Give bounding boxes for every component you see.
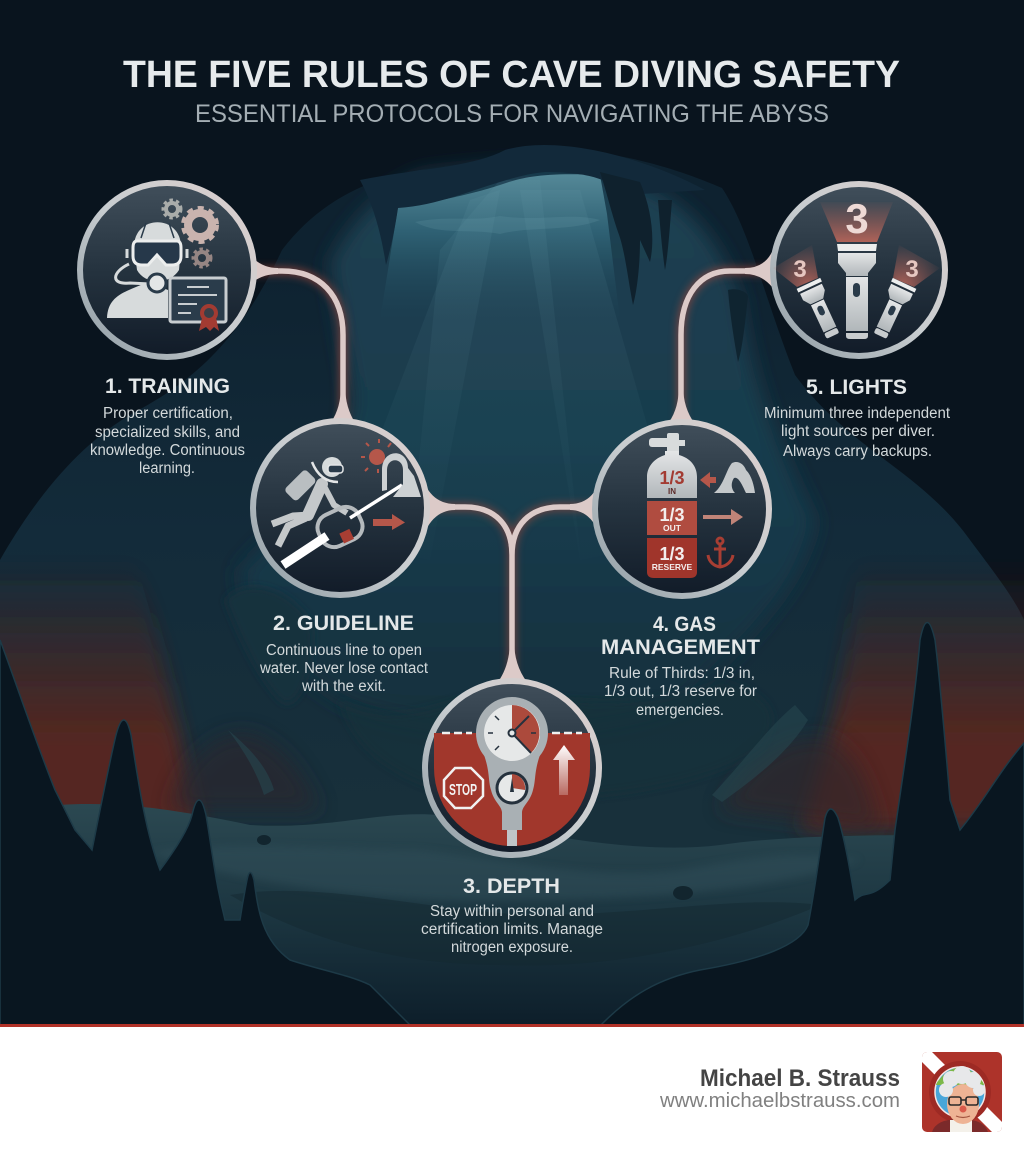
icon: lights: 3 xyxy=(845,195,869,242)
text: guideline description: Continuous line to open xyxy=(266,642,422,659)
foreground rocks: right xyxy=(600,622,1024,1026)
heading: 1. training: 1. TRAINING xyxy=(105,375,230,398)
panel: 5 lights xyxy=(764,184,951,460)
title: THE FIVE RULES OF CAVE DIVING SAFETY xyxy=(123,54,900,96)
text: training description xyxy=(90,405,245,477)
author name: Michael B. Strauss xyxy=(700,1065,900,1092)
heading: 4. gas management: 4. GAS xyxy=(653,613,716,636)
label: stop sign: STOP xyxy=(449,782,477,799)
text: guideline description: water. Never lose contact xyxy=(259,660,429,677)
footer xyxy=(0,1024,1024,1132)
icon: gas management: OUT xyxy=(663,523,682,533)
panel: 1 training xyxy=(80,183,254,477)
text: gas management description: 1/3 out, 1/3 reserve for xyxy=(604,683,757,700)
icon: training xyxy=(80,183,254,357)
text: depth description: nitrogen exposure. xyxy=(451,939,573,956)
icon: gas management: 1/3 xyxy=(659,468,685,488)
text: gas management description xyxy=(604,665,757,719)
text: training description: knowledge. Continuous xyxy=(90,442,245,459)
panel: 3 depth xyxy=(421,681,603,956)
text: depth description xyxy=(421,903,603,956)
connector lines xyxy=(238,232,780,682)
icon: lights xyxy=(773,184,945,356)
icon: gas management xyxy=(595,422,769,596)
icon: lights: 3 xyxy=(793,256,807,283)
text: depth description: Stay within personal and xyxy=(430,903,594,920)
heading: 2. guideline: 2. GUIDELINE xyxy=(273,612,414,635)
foreground rocks: left xyxy=(0,640,411,1026)
text: lights description: Minimum three independent xyxy=(764,405,951,422)
text: depth description: certification limits. Manage xyxy=(421,921,603,938)
heading: 5. lights: 5. LIGHTS xyxy=(806,376,907,399)
icon: depth xyxy=(425,681,599,855)
icon: gas management: RESERVE xyxy=(652,562,693,572)
subtitle: ESSENTIAL PROTOCOLS FOR NAVIGATING THE ABYSS xyxy=(195,100,829,128)
icon: lights: 3 xyxy=(905,256,919,283)
text: lights description: Always carry backups. xyxy=(783,443,932,460)
text: training description: Proper certification, xyxy=(103,405,233,422)
heading: 4. gas management: MANAGEMENT xyxy=(601,636,760,659)
icon: gas management: IN xyxy=(668,487,676,496)
icon: gas management: 1/3 xyxy=(659,505,685,525)
text: training description: specialized skills, and xyxy=(95,424,240,441)
author website: www.michaelbstrauss.com xyxy=(659,1090,900,1112)
text: lights description xyxy=(764,405,951,460)
text: gas management description: emergencies. xyxy=(636,702,724,719)
icon: gas management: 1/3 xyxy=(659,544,685,564)
text: guideline description xyxy=(259,642,429,695)
text: lights description: light sources per diver. xyxy=(781,423,935,440)
icon: guideline xyxy=(253,421,427,595)
text: gas management description: Rule of Thirds: 1/3 in, xyxy=(609,665,755,682)
text: training description: learning. xyxy=(139,460,195,477)
heading: 4. gas management xyxy=(601,613,760,659)
heading: 3. depth: 3. DEPTH xyxy=(463,875,560,898)
panel: 4 gas management xyxy=(595,422,769,719)
text: guideline description: with the exit. xyxy=(301,678,386,695)
logo xyxy=(922,1052,1002,1132)
panel: 2 guideline xyxy=(253,421,429,695)
